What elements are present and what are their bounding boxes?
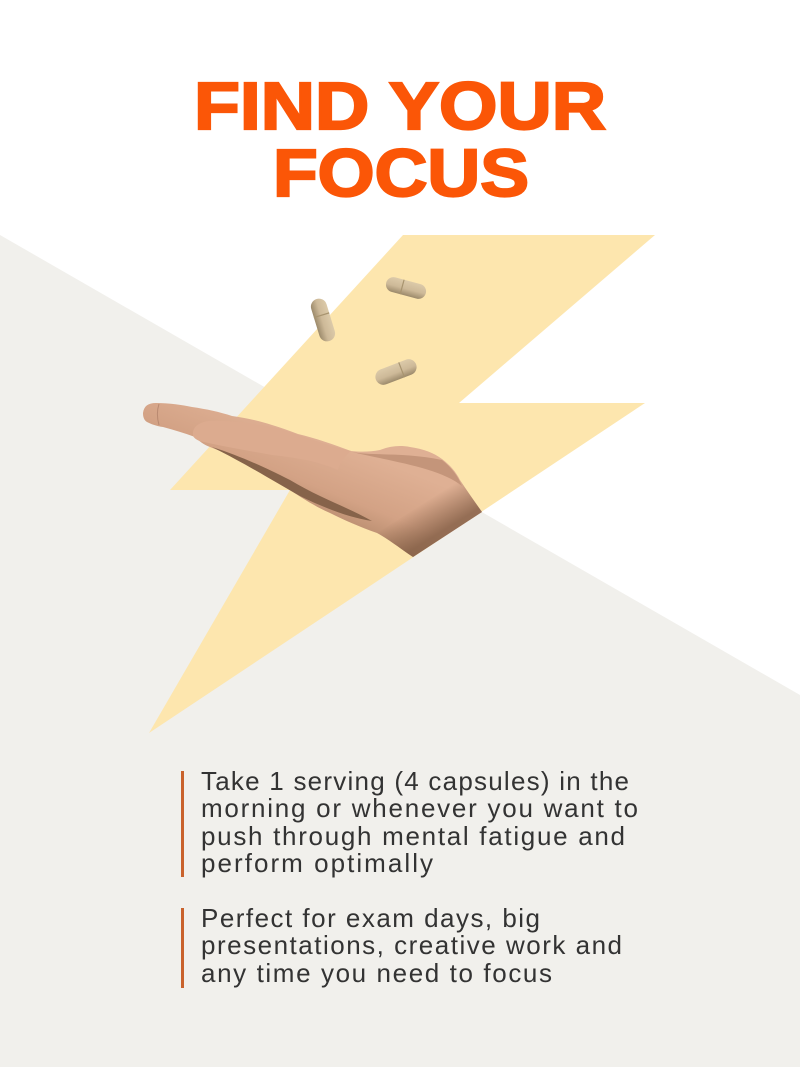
background: grey diagonal panel [0, 235, 800, 1067]
text block: serving instructions: Take 1 serving (4 capsules) in the [201, 766, 629, 796]
text block: use cases [181, 903, 622, 988]
icon: lightning bolt [149, 235, 655, 733]
text block: serving instructions: perform optimally [201, 848, 433, 878]
text block: serving instructions: push through mental fatigue and [201, 821, 625, 851]
text block: use cases: any time you need to focus [201, 958, 552, 988]
text block: serving instructions: morning or whenever you want to [201, 793, 638, 823]
text block: use cases: Perfect for exam days, big [201, 903, 540, 933]
title [194, 69, 606, 211]
text block: use cases: presentations, creative work and [201, 930, 622, 960]
icon: capsule top left [309, 297, 337, 343]
icon: capsule middle [373, 357, 419, 387]
title: FIND YOUR [194, 69, 606, 144]
icon: capsule top right [384, 275, 428, 301]
illustration: open hand [143, 403, 482, 557]
title: FOCUS [273, 136, 529, 211]
text block: serving instructions [181, 766, 638, 878]
